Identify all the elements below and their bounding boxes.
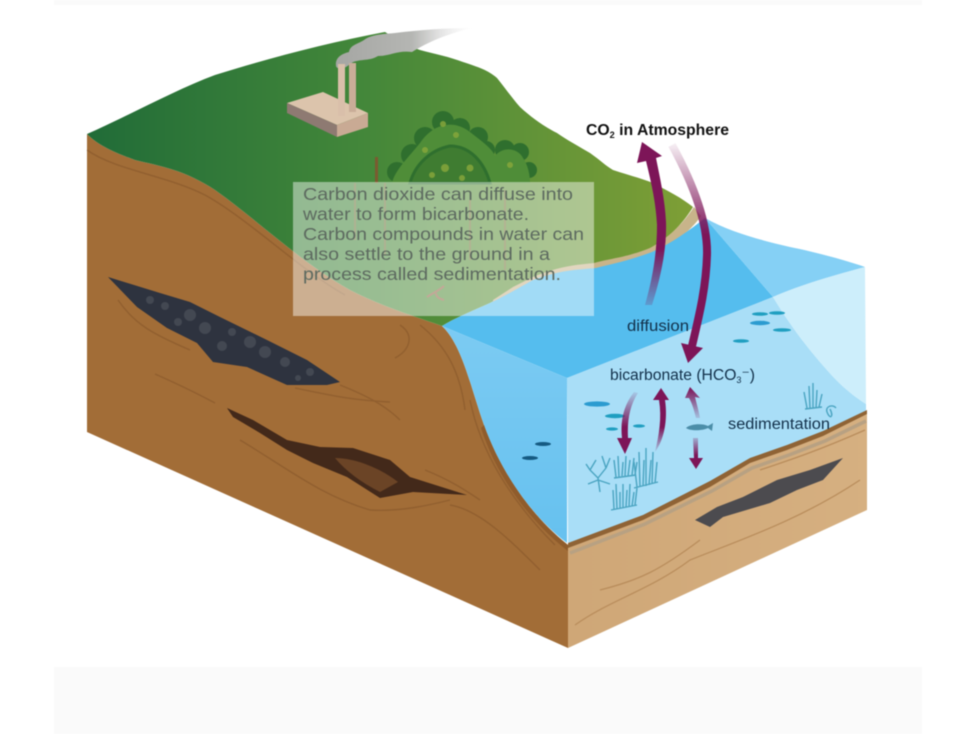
water right face	[567, 297, 866, 543]
left corner water edge brown lip	[481, 425, 568, 551]
arrow: small up to bicarbonate	[653, 388, 669, 452]
panel: water volume	[442, 218, 866, 543]
panel: sediment and rock below water	[568, 410, 867, 648]
callout: translucent text box: also settle to the ground in a	[303, 244, 550, 264]
label: bicarbonate: bicarbonate (HCO	[610, 367, 735, 384]
callout: translucent text box: Carbon dioxide can diffuse into	[303, 184, 573, 204]
label: sedimentation: sedimentation	[728, 416, 830, 433]
arrow: diffusion up to atmosphere	[637, 142, 666, 305]
icon: trees	[375, 111, 537, 183]
water surface: light	[705, 218, 865, 297]
panel: green land surface	[87, 32, 693, 326]
arrow: small down into plants	[617, 392, 638, 454]
callout: translucent text box	[293, 182, 594, 316]
icon: factory	[287, 63, 368, 137]
water surface: dark	[442, 218, 773, 378]
label: CO2 in Atmosphere: CO	[586, 122, 609, 139]
arrow: atmosphere down to bicarbonate	[672, 145, 707, 363]
label: diffusion: diffusion	[627, 318, 689, 335]
coal seam: left	[108, 277, 340, 385]
icon: fish	[686, 423, 713, 431]
shoreline sand strip	[493, 207, 701, 304]
panel: brown soil cross-section	[87, 134, 568, 648]
callout: translucent text box: process called sedimentation.	[303, 264, 561, 284]
label: bicarbonate: 3	[736, 375, 741, 385]
label: CO2 in Atmosphere: 2	[610, 130, 615, 140]
icon: seaweed plants	[586, 383, 836, 510]
callout: translucent text box: water to form bicarbonate.	[302, 204, 529, 224]
coal seam: right	[695, 458, 843, 527]
water far side pale	[773, 267, 866, 404]
icon: smoke plume	[336, 28, 472, 68]
arrow: small up from fish	[685, 387, 700, 418]
arrow: small down	[689, 438, 703, 469]
coal seam: brown peat	[227, 408, 467, 498]
label: CO2 in Atmosphere: in Atmosphere	[615, 122, 729, 139]
fish	[522, 311, 791, 460]
water left face	[442, 326, 567, 543]
background band: footer	[54, 667, 922, 734]
callout: translucent text box: Carbon compounds in water can	[303, 224, 584, 244]
icon: faint trees and bird under callout	[355, 183, 505, 300]
label: bicarbonate: ⁻)	[741, 367, 755, 384]
background band: top strip	[54, 0, 922, 5]
